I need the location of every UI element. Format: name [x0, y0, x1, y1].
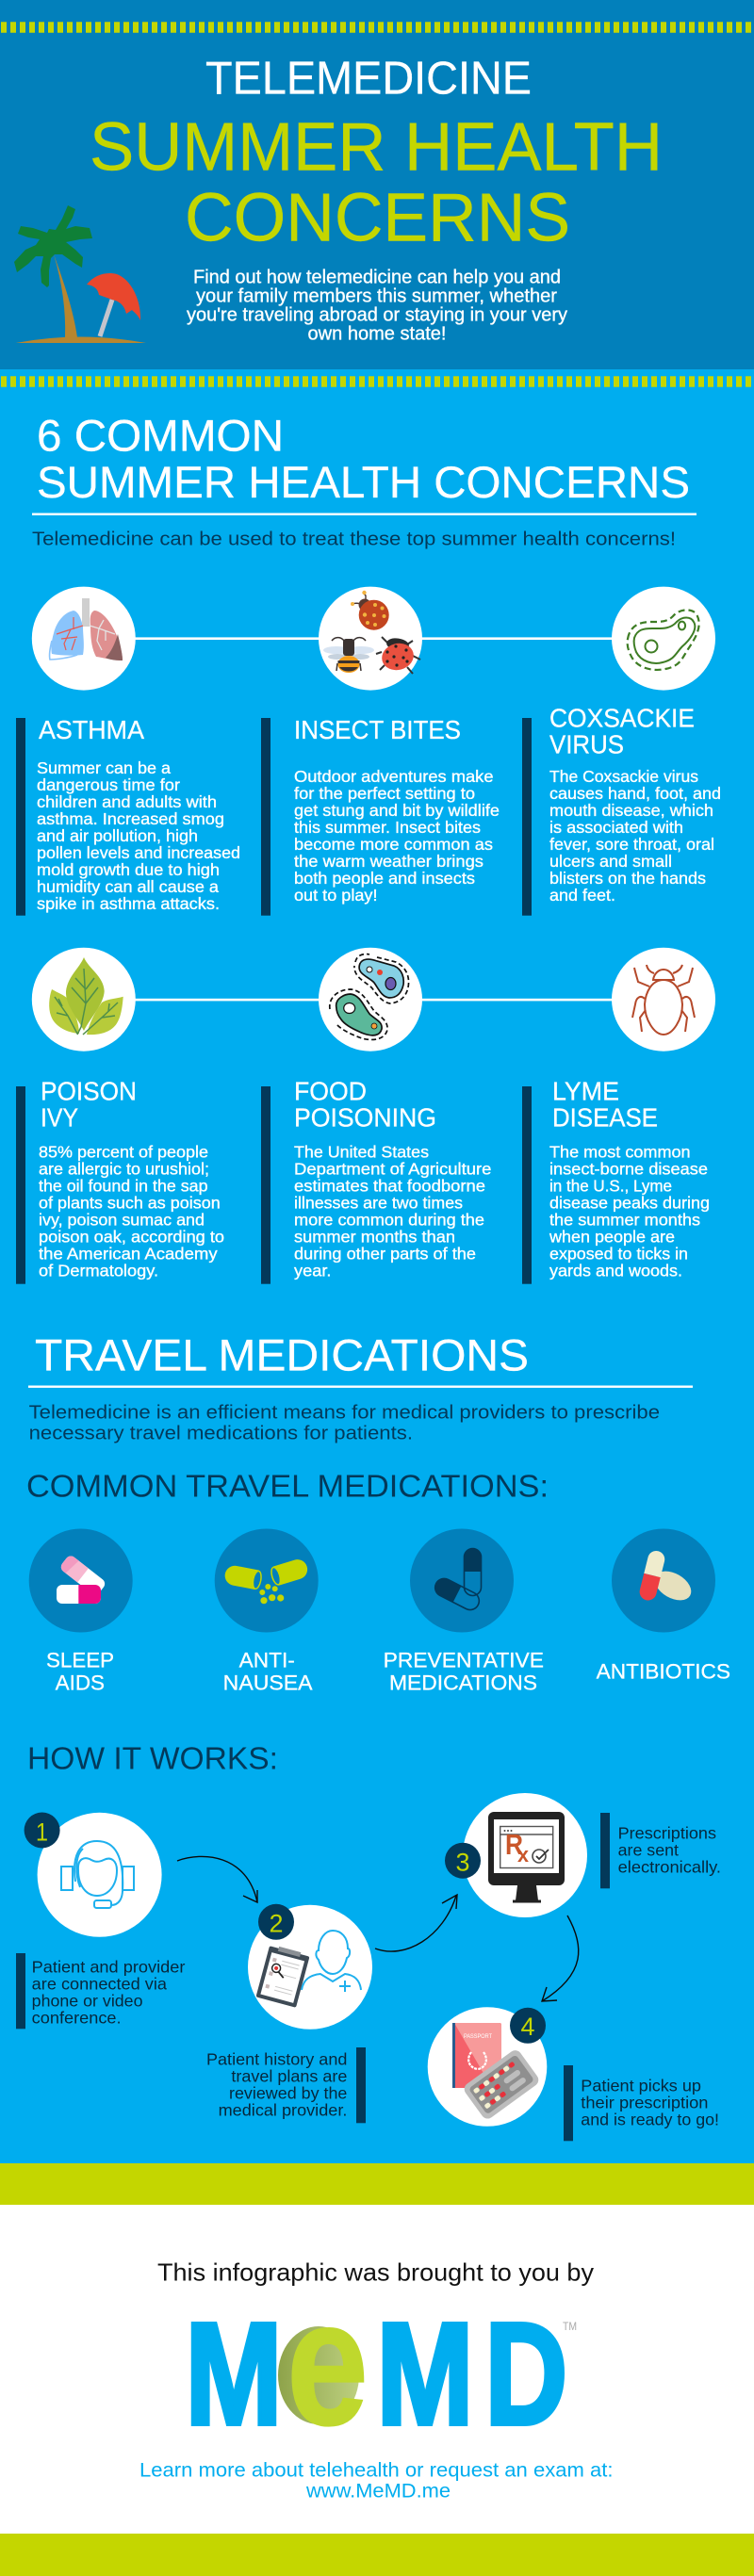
panel: poison ivy: of plants such as poison: [39, 1193, 221, 1212]
panel: lyme disease: exposed to ticks in: [549, 1244, 688, 1263]
arrow: step 3 to step 4: [542, 1916, 579, 2001]
icon: palm tree and beach umbrella: [14, 205, 146, 343]
panel: insect bites: this summer. Insect bites: [294, 818, 481, 837]
panel: coxsackie virus: VIRUS: [549, 729, 624, 758]
panel: coxsackie virus: fever, sore throat, oral: [549, 835, 714, 854]
heading: travel medications: TRAVEL MEDICATIONS: [35, 1329, 529, 1379]
step 3 icon: rx monitor: R: [505, 1828, 523, 1861]
panel: food poisoning: FOOD: [294, 1077, 367, 1106]
panel: food poisoning: POISONING: [294, 1103, 436, 1133]
panel: poison ivy: [16, 1077, 224, 1284]
icon: poison ivy leaves: [32, 948, 136, 1052]
panel: asthma: spike in asthma attacks.: [37, 894, 220, 913]
panel: poison ivy: of Dermatology.: [39, 1261, 158, 1280]
logo: MeMD: [185, 2263, 577, 2463]
label: antibiotics: ANTIBIOTICS: [597, 1659, 730, 1683]
step 4 number badge: 4: [520, 2013, 535, 2041]
step 4 text: and is ready to go!: [581, 2110, 719, 2128]
heading: how it works: HOW IT WORKS:: [27, 1740, 278, 1775]
panel: lyme disease: in the U.S., Lyme: [549, 1176, 672, 1195]
panel: food poisoning: The United States: [294, 1142, 429, 1161]
title: summer health concerns: SUMMER HEALTH: [90, 110, 663, 186]
panel: food poisoning: during other parts of the: [294, 1244, 476, 1263]
step 4 text: Patient picks up: [581, 2076, 701, 2095]
bottom green band: [0, 2534, 754, 2576]
icon: coxsackie virus: [612, 587, 715, 691]
panel: food poisoning: year.: [294, 1261, 332, 1280]
panel: food poisoning: summer months than: [294, 1227, 455, 1246]
panel: poison ivy: IVY: [41, 1103, 78, 1133]
panel: poison ivy: are allergic to urushiol;: [39, 1159, 209, 1178]
panel: insect bites: get stung and bit by wildlife: [294, 801, 500, 820]
title: summer health concerns: CONCERNS: [185, 181, 570, 256]
panel: coxsackie virus: The Coxsackie virus: [549, 767, 698, 786]
panel: asthma: children and adults with: [37, 792, 217, 811]
panel: asthma: dangerous time for: [37, 775, 180, 794]
icon: lungs: [32, 587, 136, 691]
label: anti-nausea: ANTI-: [239, 1648, 295, 1671]
icon: preventative medications: [410, 1528, 514, 1632]
label: anti-nausea: [223, 1648, 313, 1694]
step 4 text: [564, 2065, 719, 2141]
intro paragraph: [187, 266, 568, 345]
label: preventative medications: [384, 1648, 544, 1694]
panel: coxsackie virus: COXSACKIE: [549, 704, 695, 733]
panel: insect bites: out to play!: [294, 886, 377, 905]
travel intro text: necessary travel medications for patients.: [29, 1424, 413, 1444]
icon: sleep aids: [29, 1528, 133, 1632]
section intro text: Telemedicine can be used to treat these top summer health concerns!: [32, 529, 676, 550]
panel: food poisoning: estimates that foodborne: [294, 1176, 485, 1195]
icon: food poisoning bacteria: [319, 948, 422, 1052]
panel: insect bites: both people and insects: [294, 869, 475, 888]
heading: 6 common summer health concerns: 6 COMMON: [37, 410, 284, 460]
step 3 number badge: 3: [456, 1849, 469, 1877]
panel: lyme disease: [522, 1077, 710, 1284]
panel: lyme disease: The most common: [549, 1142, 691, 1161]
logo: MeMD: e: [287, 2263, 369, 2463]
icon: insects: [319, 587, 422, 691]
step 3 text: electronically.: [618, 1857, 721, 1876]
step 2 text: travel plans are: [231, 2066, 347, 2085]
label: sleep aids: [46, 1648, 114, 1694]
panel: coxsackie virus: blisters on the hands: [549, 869, 706, 888]
icon: tick: [612, 948, 715, 1052]
title: summer health concerns: [90, 110, 663, 256]
logo: MeMD: D: [484, 2293, 567, 2455]
call to action: www.MeMD.me: [305, 2480, 451, 2503]
step 3 text: [600, 1813, 721, 1888]
panel: poison ivy: poison oak, according to: [39, 1227, 224, 1246]
step 2 text: [206, 2047, 366, 2123]
panel: asthma: mold growth due to high: [37, 860, 220, 879]
label: sleep aids: AIDS: [56, 1671, 105, 1694]
panel: lyme disease: when people are: [549, 1227, 675, 1246]
intro paragraph: your family members this summer, whether: [196, 285, 557, 307]
panel: asthma: humidity can all cause a: [37, 877, 219, 896]
step 3 text: Prescriptions: [618, 1823, 716, 1842]
step 1 number badge: 1: [36, 1818, 48, 1846]
panel: poison ivy: POISON: [41, 1077, 137, 1106]
panel: lyme disease: DISEASE: [552, 1103, 658, 1133]
step 2 text: medical provider.: [219, 2100, 347, 2119]
panel: coxsackie virus: mouth disease, which: [549, 801, 713, 820]
step 2 text: Patient history and: [206, 2049, 347, 2068]
panel: coxsackie virus: is associated with: [549, 818, 683, 837]
heading: 6 common summer health concerns: [32, 410, 697, 515]
panel: lyme disease: the summer months: [549, 1210, 700, 1229]
panel: poison ivy: ivy, poison sumac and: [39, 1210, 205, 1229]
label: anti-nausea: NAUSEA: [223, 1671, 313, 1694]
connector line row 2: [132, 999, 613, 1001]
label: sleep aids: SLEEP: [46, 1648, 114, 1671]
connector line row 1: [132, 637, 613, 640]
panel: asthma: pollen levels and increased: [37, 843, 240, 862]
panel: lyme disease: disease peaks during: [549, 1193, 710, 1212]
panel: insect bites: the warm weather brings: [294, 852, 484, 871]
arrow: step 2 to step 3: [375, 1895, 457, 1951]
panel: insect bites: become more common as: [294, 835, 493, 854]
panel: poison ivy: the oil found in the sap: [39, 1176, 207, 1195]
panel: coxsackie virus: [522, 704, 721, 916]
panel: insect bites: INSECT BITES: [294, 715, 461, 744]
footer green band: [0, 2163, 754, 2205]
travel intro text: [29, 1402, 660, 1444]
panel: asthma: and air pollution, high: [37, 826, 198, 845]
panel: lyme disease: yards and woods.: [549, 1261, 682, 1280]
icon: anti-nausea: [215, 1528, 319, 1632]
intro paragraph: Find out how telemedicine can help you and: [193, 266, 561, 287]
step 1 text: Patient and provider: [32, 1957, 186, 1976]
step 1 text: are connected via: [32, 1974, 167, 1993]
arrow: step 1 to step 2: [177, 1856, 257, 1902]
step 4 icon: passport and pills: [428, 2007, 547, 2127]
icon: antibiotics: [612, 1528, 715, 1632]
step 3 icon: rx monitor: x: [517, 1843, 530, 1867]
footer white panel: [0, 2205, 754, 2534]
panel: food poisoning: more common during the: [294, 1210, 484, 1229]
step 1 text: [16, 1953, 186, 2029]
step 2 number badge: 2: [270, 1910, 283, 1938]
logo: MeMD: M: [377, 2293, 473, 2455]
intro paragraph: own home state!: [307, 322, 447, 345]
panel: poison ivy: 85% percent of people: [39, 1142, 208, 1161]
credit line: This infographic was brought to you by: [157, 2258, 594, 2287]
call to action: [139, 2458, 613, 2503]
step 1 text: phone or video: [32, 1991, 143, 2010]
step 3 number badge: [445, 1843, 481, 1879]
panel: asthma: asthma. Increased smog: [37, 809, 224, 828]
panel: food poisoning: Department of Agriculture: [294, 1159, 491, 1178]
panel: food poisoning: [261, 1077, 491, 1284]
intro paragraph: you're traveling abroad or staying in your very: [187, 304, 568, 326]
step 3 text: are sent: [618, 1840, 679, 1859]
step 2 text: reviewed by the: [229, 2083, 347, 2102]
heading: common travel medications: COMMON TRAVEL MEDICATIONS:: [26, 1468, 549, 1503]
step 3 icon: rx monitor: [463, 1793, 587, 1917]
step 1 number badge: [25, 1813, 60, 1849]
logo: MeMD: M: [185, 2293, 283, 2455]
step 2 icon: clipboard and doctor: [248, 1905, 372, 2030]
step 1 text: conference.: [32, 2008, 122, 2027]
panel: asthma: Summer can be a: [37, 758, 171, 777]
panel: asthma: ASTHMA: [39, 715, 144, 744]
panel: insect bites: Outdoor adventures make: [294, 767, 494, 786]
step 4 number badge: [510, 2008, 546, 2044]
panel: lyme disease: insect-borne disease: [549, 1159, 708, 1178]
heading: 6 common summer health concerns: SUMMER HEALTH CONCERNS: [37, 457, 690, 507]
label: preventative medications: MEDICATIONS: [389, 1671, 537, 1694]
panel: coxsackie virus: ulcers and small: [549, 852, 672, 871]
panel: coxsackie virus: causes hand, foot, and: [549, 784, 721, 803]
step 4 icon: passport and pills: PASSPORT: [464, 2034, 492, 2040]
header panel: [0, 0, 754, 382]
title: telemedicine: TELEMEDICINE: [205, 53, 532, 104]
panel: food poisoning: illnesses are two times: [294, 1193, 463, 1212]
step 4 text: their prescription: [581, 2093, 709, 2111]
logo: MeMD: TM: [563, 2320, 577, 2333]
call to action: Learn more about telehealth or request an exam at:: [139, 2458, 613, 2481]
travel intro text: Telemedicine is an efficient means for medical providers to prescribe: [29, 1402, 660, 1423]
panel: coxsackie virus: and feet.: [549, 886, 615, 905]
panel: insect bites: for the perfect setting to: [294, 784, 475, 803]
panel: asthma: [16, 715, 240, 916]
panel: poison ivy: the American Academy: [39, 1244, 218, 1263]
panel: lyme disease: LYME: [552, 1077, 619, 1106]
label: preventative medications: PREVENTATIVE: [384, 1648, 544, 1671]
panel: insect bites: [261, 715, 500, 916]
step 2 number badge: [258, 1904, 294, 1940]
step 1 icon: provider headset: [38, 1813, 162, 1937]
